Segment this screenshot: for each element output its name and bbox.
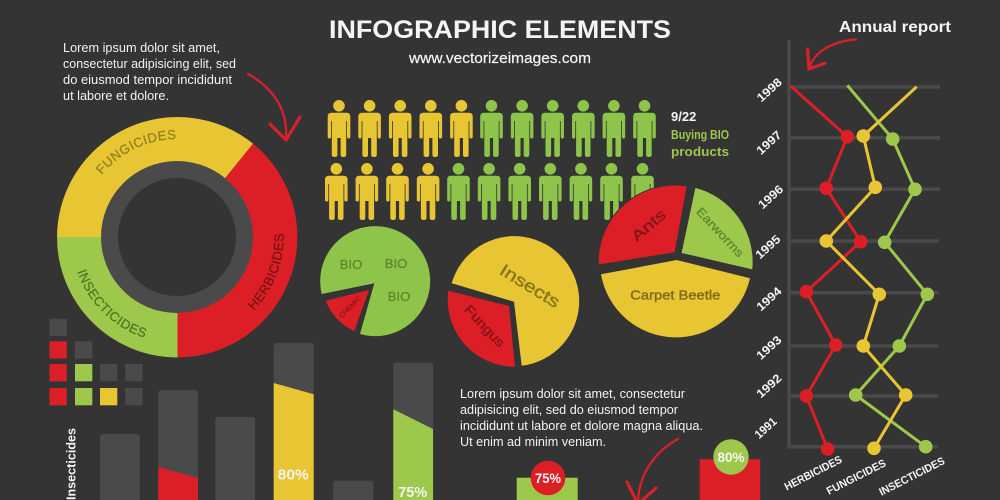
text block: lower paragraph: adipisicing elit, sed do eiusmod tempor [460, 402, 679, 417]
year labels: 1991 [752, 414, 780, 442]
donut chart [57, 117, 298, 358]
bar 6: 75% [393, 363, 433, 500]
donut label: insecticides: INSECTICIDES [78, 270, 146, 337]
callout: 9/22 buying BIO products: Buying BIO [671, 127, 729, 142]
title: INFOGRAPHIC ELEMENTS [329, 16, 671, 44]
pie chart: insects and fungus [448, 236, 579, 367]
text block: donut intro: Lorem ipsum dolor sit amet, [63, 40, 220, 55]
subtitle: website: www.vectorizeimages.com [408, 51, 591, 67]
rating squares [50, 319, 143, 405]
bar 5 [333, 481, 373, 500]
pie labels: BIO [340, 256, 410, 304]
line series: herbicides [791, 86, 868, 456]
donut centre [118, 178, 236, 296]
donut label: herbicides: HERBICIDES [248, 234, 284, 310]
pie slice: chemic [326, 290, 369, 331]
year labels: 1993 [754, 333, 785, 363]
year labels [752, 75, 786, 442]
bar 4: 80%: 80% [278, 466, 309, 484]
series labels [783, 454, 947, 499]
year labels: 1996 [755, 182, 786, 212]
stat bar: 80%: 80% [718, 450, 744, 465]
year labels: 1992 [754, 371, 785, 401]
pie chart: BIO [320, 226, 430, 336]
text block: donut intro: ut labore et dolore. [63, 88, 169, 103]
callout: 9/22 buying BIO products [671, 109, 729, 159]
callout: 9/22 buying BIO products: products [671, 144, 729, 159]
chart axes and gridlines [787, 40, 940, 447]
bar 3 [215, 417, 255, 500]
donut label: fungicides: FUNGICIDES [96, 130, 176, 174]
text block: donut intro: do eiusmod tempor incididunt [63, 72, 232, 87]
text block: lower paragraph: Lorem ipsum dolor sit amet, consectetur [460, 386, 686, 401]
bar 2 [158, 390, 198, 500]
bar chart [100, 343, 433, 500]
series labels: INSECTICIDES [877, 455, 947, 499]
stat bar: 75%: 75% [535, 471, 561, 486]
year labels: 1998 [754, 75, 785, 105]
heading: annual report: Annual report [839, 19, 952, 36]
pie label: earworms: Earworms [693, 205, 747, 260]
donut segment: insecticides [57, 237, 178, 358]
pie label: insects: Insects [496, 260, 563, 312]
callout: 9/22 buying BIO products: 9/22 [671, 109, 696, 124]
pie label: ants: Ants [628, 206, 670, 245]
year labels: 1994 [754, 284, 785, 314]
stat bar: 80% [700, 439, 760, 500]
donut inner ring [101, 161, 253, 313]
series labels: HERBICIDES [783, 454, 844, 493]
arrow: lower down [627, 439, 678, 500]
donut segment: fungicides [57, 117, 253, 237]
pie label: carpet beetle: Carpet Beetle [630, 288, 720, 302]
line series: insecticides [847, 85, 934, 454]
pie slice: insects [452, 236, 579, 366]
bar 4: 80% [274, 343, 314, 500]
pie slice: ants [598, 185, 687, 265]
arrow: annual report [808, 39, 856, 69]
donut segment: herbicides [178, 144, 297, 358]
bar 1 [100, 434, 140, 500]
pie slice: carpet beetle [601, 260, 750, 337]
pie slice: fungus [448, 291, 515, 367]
pie slice: earworms [681, 187, 753, 270]
text block: lower paragraph: incididunt ut labore et dolore magna aliqua. [460, 418, 703, 433]
year labels: 1995 [753, 232, 784, 262]
series labels: FUNGICIDES [825, 457, 888, 498]
text block: lower paragraph [460, 386, 703, 449]
arrow: to donut [248, 74, 300, 140]
pie label: fungus: Fungus [461, 302, 508, 351]
pie labels: BIO: BIO [388, 289, 410, 304]
line series: fungicides [820, 87, 917, 455]
year labels: 1997 [754, 128, 785, 158]
pie chart: ants, earworms, carpet beetle [598, 185, 753, 337]
stat bar: 75% [517, 461, 578, 500]
axis label: insecticides: Insecticides [64, 428, 78, 500]
text block: donut intro [63, 40, 236, 103]
text block: donut intro: consectetur adipisicing elit, sed [63, 56, 236, 71]
pie labels: BIO: BIO [385, 256, 407, 271]
text block: lower paragraph: Ut enim ad minim veniam. [460, 434, 606, 449]
pie slice: BIO [320, 226, 430, 336]
pie labels: BIO: BIO [340, 257, 362, 272]
pie label: chemic: CHEMIC [338, 295, 363, 320]
line chart: annual report [752, 40, 947, 499]
people pictogram: 9 of 22 [325, 100, 656, 220]
